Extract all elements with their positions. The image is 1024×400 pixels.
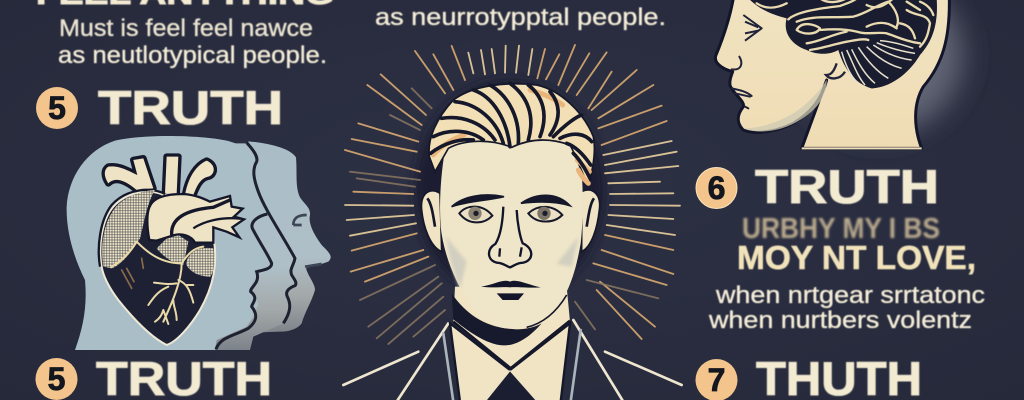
- heart coronary branches: [112, 242, 203, 324]
- brain illustration halo: [775, 0, 985, 155]
- third head eye and mouth: [293, 215, 322, 267]
- right body text: when nurtbers volentz: [708, 307, 972, 334]
- ear: [826, 63, 845, 78]
- badge 5 upper: 5: [48, 90, 66, 126]
- right body text: when nrtgear srrtatonc: [715, 282, 985, 309]
- illustration: radiating lines: [345, 45, 680, 344]
- illustration: head profiles with heart: [67, 136, 331, 350]
- hair: [429, 83, 594, 185]
- heart upper chambers: [147, 194, 244, 243]
- badge 5 lower: 5: [48, 361, 65, 397]
- brain: [748, 0, 937, 88]
- badge 7: 7: [708, 362, 725, 398]
- brain folds: [757, 0, 933, 50]
- eyes: [459, 207, 562, 222]
- second profile line: [247, 143, 296, 323]
- top centre body text: as neurrotypptal people.: [375, 4, 666, 31]
- subheading love: MOY NT LOVE,: [737, 239, 976, 276]
- suit lapel lines: [343, 320, 682, 400]
- neck: [453, 287, 570, 368]
- top left body text: Must is feel feel nawce: [59, 15, 313, 42]
- badge 6: [696, 168, 737, 208]
- chin shadow: [452, 293, 542, 345]
- shirt: [450, 323, 570, 400]
- badge 7: [696, 359, 738, 400]
- illustration: head profile with brain: [715, 0, 949, 148]
- third head silhouette: [233, 141, 331, 333]
- front profile line: [216, 214, 272, 349]
- badge 6: 6: [708, 170, 725, 206]
- dark glow behind portrait: [415, 80, 605, 300]
- second head silhouette: [213, 143, 297, 350]
- top left body text: [58, 15, 327, 69]
- eyebrows: [452, 195, 570, 207]
- cerebellum: [838, 42, 917, 88]
- blurred subheading: URBHY MY I BS: [742, 213, 940, 245]
- jaw shading: [743, 79, 827, 132]
- mouth: [481, 281, 541, 300]
- illustration: man portrait: [343, 83, 682, 400]
- hair strands: [431, 83, 592, 178]
- badge 5 lower: [36, 358, 78, 400]
- front head silhouette: [67, 136, 272, 350]
- heart: [99, 157, 244, 345]
- head silhouette: [715, 0, 949, 148]
- badge 5 upper: [36, 87, 78, 129]
- jaw line right: [527, 295, 567, 327]
- cheek shading: [446, 237, 578, 288]
- hair gold highlights: [433, 90, 589, 183]
- nose: [489, 207, 531, 267]
- eye: [743, 15, 762, 41]
- heart stippled lobes: [102, 190, 155, 268]
- tie: [485, 371, 537, 400]
- face: [440, 137, 583, 329]
- heart vessels: [105, 157, 214, 195]
- heart body: [100, 192, 215, 345]
- heading truth upper left: TRUTH: [98, 81, 283, 134]
- heading truth right: TRUTH: [755, 160, 939, 213]
- right body text: [708, 282, 985, 334]
- nose and mouth: [732, 57, 752, 108]
- ears: [421, 191, 442, 252]
- top left body text: as neutlotypical people.: [58, 42, 327, 69]
